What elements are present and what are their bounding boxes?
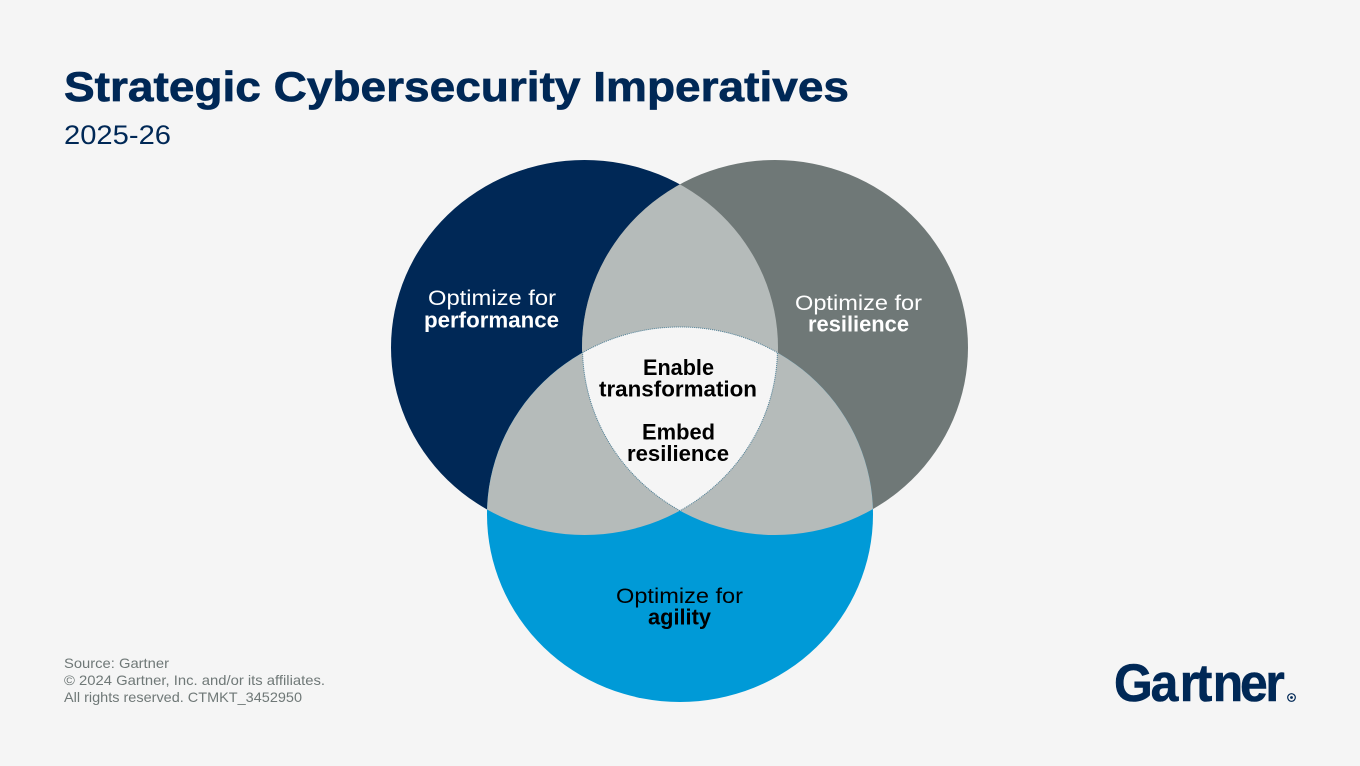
center line 1: Enable [643,355,714,380]
venn diagram [391,160,968,702]
label line 1: Optimize for [616,585,743,608]
center line 1: Embed [642,420,715,444]
rights line: All rights reserved. CTMKT_3452950 [64,689,302,705]
circle: performance [391,160,778,535]
logo wordmark: Gartner [1114,653,1285,712]
center overlap [583,327,777,511]
copyright line: © 2024 Gartner, Inc. and/or its affiliates. [64,672,325,688]
logo: Gartner [1114,653,1295,712]
label: optimize for performance [424,287,559,332]
label line 2: agility [648,604,712,630]
label line 1: Optimize for [795,292,922,315]
label line 2: performance [424,308,559,332]
subtitle: 2025-26 [64,120,171,150]
source footer [64,655,325,705]
center line 2: transformation [599,376,757,402]
label: optimize for agility [616,585,743,630]
circle: agility [487,327,873,702]
center label: enable transformation [599,355,757,402]
center label: embed resilience [627,420,729,466]
source line: Source: Gartner [64,655,169,671]
label line 2: resilience [808,312,909,336]
circle: resilience [582,160,968,535]
label line 1: Optimize for [428,287,556,310]
overlap: performance and agility [487,353,680,535]
center line 2: resilience [627,441,729,466]
logo registered mark [1288,694,1295,701]
overlap: performance and resilience [582,184,778,353]
overlap: resilience and agility [680,353,873,535]
label: optimize for resilience [795,292,922,336]
title: Strategic Cybersecurity Imperatives [64,63,849,110]
